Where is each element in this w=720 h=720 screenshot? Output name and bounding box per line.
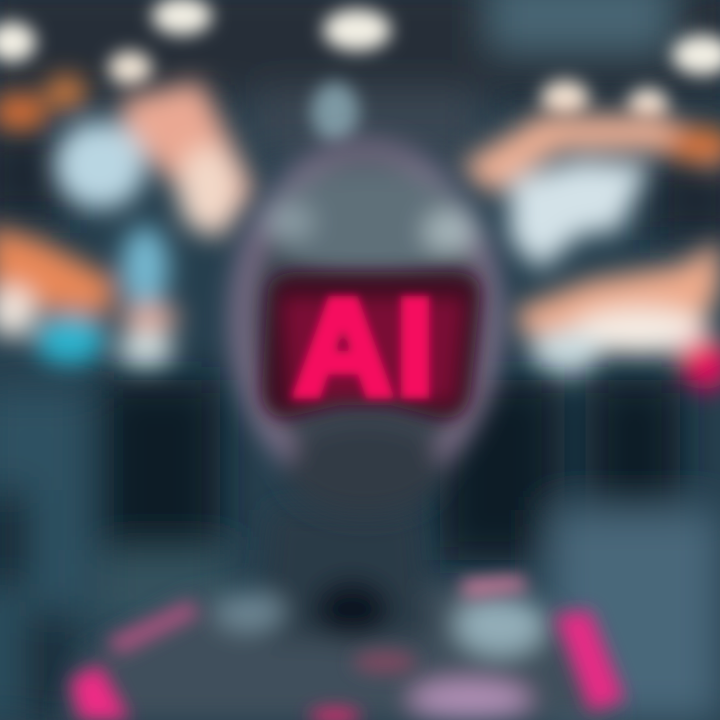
robot figure [60,142,625,720]
pink shoulder stripes [70,575,625,720]
left crowd highlights: orange and pale blue [0,76,255,374]
right crowd highlights: orange and pale blue [460,115,720,390]
ceiling lights [0,0,720,142]
visor label: AI: AI [294,271,438,423]
robot head [231,142,501,516]
robot shoulders and torso [60,510,620,720]
lower crowd silhouettes [0,380,720,720]
red visor [262,272,480,418]
background: upper dark area [0,0,720,240]
